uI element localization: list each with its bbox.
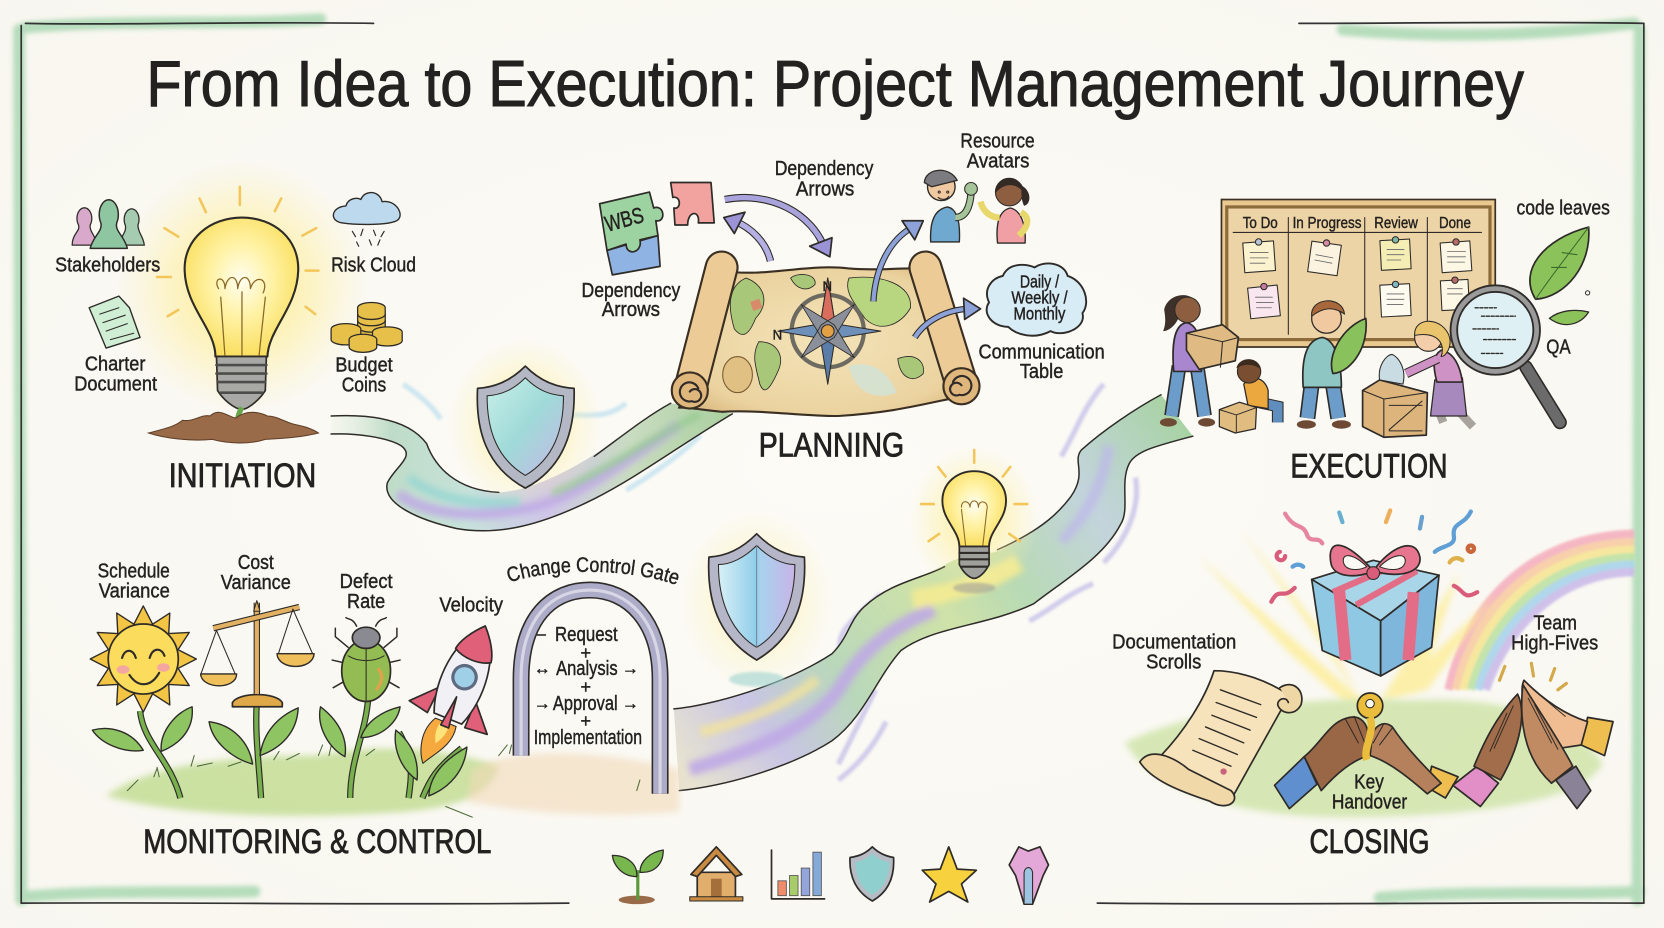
label: budget coins — [335, 353, 393, 397]
label: change control gate: Change Control Gate — [507, 557, 678, 584]
figure: child with box — [1219, 359, 1278, 433]
icon: compass rose: N — [822, 279, 832, 294]
icon: wbs puzzle pieces: WBS — [602, 202, 646, 237]
board column headers: Review — [1374, 215, 1418, 232]
label: cost variance: Cost — [238, 551, 274, 574]
label: code leaves: code leaves — [1516, 196, 1610, 219]
label: schedule variance — [98, 559, 170, 602]
label: team high-fives: High-Fives — [1511, 631, 1598, 654]
icon: treasure map scroll — [672, 267, 980, 416]
icon: glowing light bulb — [117, 161, 367, 427]
label: qa: QA — [1546, 335, 1571, 358]
icon: sprout — [612, 850, 663, 904]
golden light rays — [1199, 531, 1496, 706]
heading: planning: PLANNING — [759, 426, 904, 464]
icon: communication cloud: Weekly / — [1011, 288, 1068, 308]
panel: monitoring and control — [90, 551, 684, 861]
board column headers: In Progress — [1293, 215, 1362, 232]
icon: shield on river — [449, 340, 602, 509]
heading: initiation: INITIATION — [169, 457, 316, 495]
text: change process steps: + — [580, 677, 591, 697]
icon row: journey milestones — [612, 847, 1048, 904]
label: budget coins: Budget — [335, 353, 393, 376]
label: charter document: Charter — [85, 352, 145, 375]
ground wash — [106, 749, 499, 816]
label: charter document — [74, 352, 157, 396]
panel: closing — [1112, 510, 1634, 861]
label: dependency arrows top: Dependency — [775, 157, 874, 180]
icon: kanban board — [1221, 200, 1495, 347]
icon: communication cloud — [987, 263, 1086, 336]
icon: small shield — [850, 847, 894, 901]
text: change process steps — [534, 623, 642, 749]
rainbow — [1449, 534, 1634, 690]
label: resource avatars: Resource — [960, 130, 1035, 153]
text: change process steps: ↔ — [534, 659, 551, 678]
label: dependency arrows top — [775, 157, 874, 200]
label: schedule variance: Variance — [99, 579, 170, 602]
grass wash — [1125, 699, 1602, 817]
label: documentation scrolls: Scrolls — [1146, 651, 1201, 674]
label: communication table — [978, 341, 1105, 383]
arrow: dependency curve from map to puzzle — [724, 212, 770, 261]
label: budget coins: Coins — [342, 374, 386, 397]
icon: rocket — [389, 610, 525, 782]
text: change process steps: → — [622, 694, 639, 713]
panel: planning — [582, 130, 1105, 464]
icon: code leaf — [1530, 227, 1590, 325]
figure: person at crate — [1406, 321, 1473, 427]
text: change process steps: + — [580, 711, 591, 731]
confetti — [1271, 510, 1477, 602]
icon: key handover hands — [1275, 693, 1458, 809]
label: schedule variance: Schedule — [98, 559, 170, 582]
label: risk cloud: Risk Cloud — [331, 254, 416, 277]
label: velocity: Velocity — [439, 593, 504, 616]
arrow: map to resource avatars — [873, 221, 923, 301]
panel: execution — [1160, 196, 1610, 486]
icon: compass rose — [773, 278, 881, 384]
label: dependency arrows left: Dependency — [582, 279, 681, 302]
heading: monitoring and control: MONITORING & CONTROL — [143, 823, 491, 861]
label: resource avatars: Avatars — [967, 150, 1029, 173]
icon: wooden crate — [1363, 354, 1427, 437]
label: documentation scrolls: Documentation — [1112, 630, 1236, 653]
icon: light bulb on river — [908, 446, 1040, 594]
icon: stakeholders — [72, 200, 144, 248]
label: documentation scrolls — [1112, 630, 1236, 674]
label: defect rate: Rate — [347, 590, 385, 613]
arrow: dependency curve from puzzle to map — [725, 198, 832, 257]
label: defect rate: Defect — [340, 570, 393, 593]
heading: execution: EXECUTION — [1290, 448, 1448, 486]
icon: charter document — [89, 296, 140, 348]
text: change process steps: Approval — [553, 692, 618, 715]
label: dependency arrows left — [582, 279, 681, 321]
icon: team high-fives — [1453, 663, 1613, 809]
panel: initiation — [55, 161, 416, 495]
icon: communication cloud: Daily / — [1020, 272, 1059, 292]
board column headers: Done — [1439, 215, 1471, 232]
label: charter document: Document — [74, 373, 157, 396]
icon: star — [922, 847, 976, 902]
label: resource avatars — [960, 130, 1035, 173]
plant stems and leaves — [92, 697, 467, 798]
label: cost variance: Variance — [221, 571, 291, 594]
dirt path wash — [467, 753, 679, 815]
text: change process steps: Analysis — [556, 657, 618, 680]
label: key handover — [1332, 770, 1407, 814]
text: change process steps: – — [537, 626, 546, 643]
figure: person holding leaf — [1297, 301, 1366, 429]
label: key handover: Handover — [1332, 791, 1407, 814]
label: cost variance — [221, 551, 291, 594]
icon: smiling sun — [90, 606, 196, 712]
icon: resource avatars — [924, 170, 1029, 243]
grass tufts — [127, 745, 659, 817]
icon: risk cloud — [333, 193, 400, 246]
icon: gift box — [1312, 545, 1439, 676]
winding river path: lower section — [674, 384, 1193, 791]
icon: shield near gate — [680, 509, 833, 690]
icon: budget coins — [331, 302, 402, 352]
label: communication table: Communication — [978, 341, 1105, 364]
label: communication table: Table — [1020, 360, 1063, 383]
board column headers — [1243, 215, 1471, 232]
label: team high-fives: Team — [1533, 611, 1577, 634]
label: team high-fives — [1511, 611, 1598, 654]
figure: person carrying box — [1160, 295, 1238, 427]
text: change process steps: Implementation — [534, 726, 642, 749]
heading: closing: CLOSING — [1310, 823, 1429, 861]
icon: beetle — [332, 618, 400, 701]
text: change process steps: → — [534, 694, 551, 713]
icon: balance scale — [201, 601, 314, 707]
icon: soil mound — [149, 412, 318, 443]
text: change process steps: + — [580, 643, 591, 663]
label: key handover: Key — [1354, 770, 1384, 793]
board column headers: To Do — [1243, 215, 1278, 232]
label: dependency arrows left: Arrows — [602, 298, 660, 321]
label: dependency arrows top: Arrows — [796, 177, 854, 200]
icon: communication cloud: Monthly — [1013, 303, 1066, 323]
winding river path: upper section — [331, 384, 732, 531]
icon: bar chart — [772, 850, 825, 899]
icon: change control gate arch — [521, 590, 660, 794]
text: change process steps: Request — [555, 623, 618, 646]
icon: compass rose: N — [773, 328, 782, 343]
sticky notes — [1243, 237, 1472, 319]
text: change process steps: → — [622, 659, 639, 678]
label: stakeholders: Stakeholders — [55, 254, 160, 277]
arrow: map to communication cloud — [915, 298, 981, 337]
icon: house — [690, 847, 743, 901]
icon: wbs puzzle pieces — [600, 183, 714, 275]
icon: pen nib — [1009, 847, 1048, 904]
title: From Idea to Execution: Project Management Journey — [146, 47, 1524, 120]
label: defect rate — [340, 570, 393, 613]
icon: documentation scroll — [1140, 671, 1302, 806]
icon: qa magnifying glass — [1454, 289, 1560, 422]
